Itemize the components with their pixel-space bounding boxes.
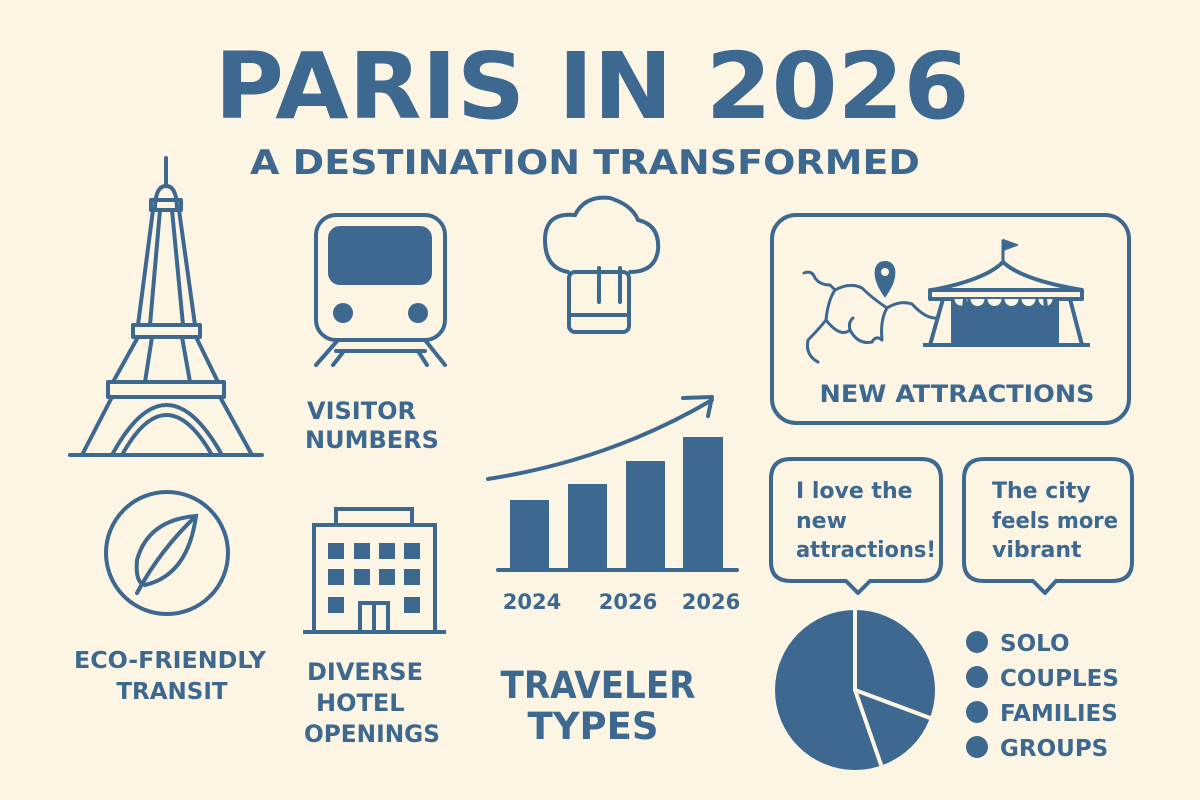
icon: chef hat (545, 198, 658, 332)
icon: map with pin (804, 262, 935, 362)
bar chart: 2024 (503, 590, 561, 614)
panel: new attractions (772, 215, 1129, 423)
legend: COUPLES (1000, 666, 1119, 692)
callout: i love the new attractions: attractions! (796, 538, 936, 563)
callout: i love the new attractions: new (796, 509, 847, 534)
legend: FAMILIES (1000, 701, 1118, 727)
text: OPENINGS (304, 720, 440, 748)
icon: leaf in circle (106, 492, 228, 614)
callout: the city feels more vibrant (964, 459, 1132, 593)
callout: the city feels more vibrant: The city (992, 479, 1091, 504)
subtitle: A DESTINATION TRANSFORMED (250, 143, 920, 183)
callout: i love the new attractions (771, 459, 941, 593)
callout: i love the new attractions: I love the (796, 479, 913, 504)
text: NUMBERS (305, 426, 439, 454)
text: HOTEL (316, 689, 405, 717)
text: TRANSIT (116, 679, 228, 705)
label: visitor numbers: VISITOR (307, 397, 416, 425)
label: new attractions: NEW ATTRACTIONS (820, 380, 1094, 408)
callout: the city feels more vibrant: feels more (992, 509, 1118, 534)
bar chart: 2026 (682, 590, 740, 614)
legend: SOLO (1000, 631, 1070, 657)
icon: circus tent (923, 240, 1090, 345)
pie chart (775, 609, 935, 782)
label: traveler types: TRAVELER (500, 664, 696, 707)
icon: train (316, 215, 445, 365)
legend: GROUPS (1000, 736, 1108, 762)
label: eco-friendly transit: ECO-FRIENDLY (74, 648, 266, 674)
legend (966, 631, 1119, 762)
bar chart: 2026 (599, 590, 657, 614)
bar chart (488, 397, 740, 614)
text: TYPES (527, 705, 659, 748)
icon: hotel (303, 509, 446, 632)
icon: eiffel tower (70, 158, 262, 455)
label: diverse hotel openings: DIVERSE (307, 658, 423, 686)
title: PARIS IN 2026 (214, 33, 970, 140)
callout: the city feels more vibrant: vibrant (992, 538, 1082, 563)
